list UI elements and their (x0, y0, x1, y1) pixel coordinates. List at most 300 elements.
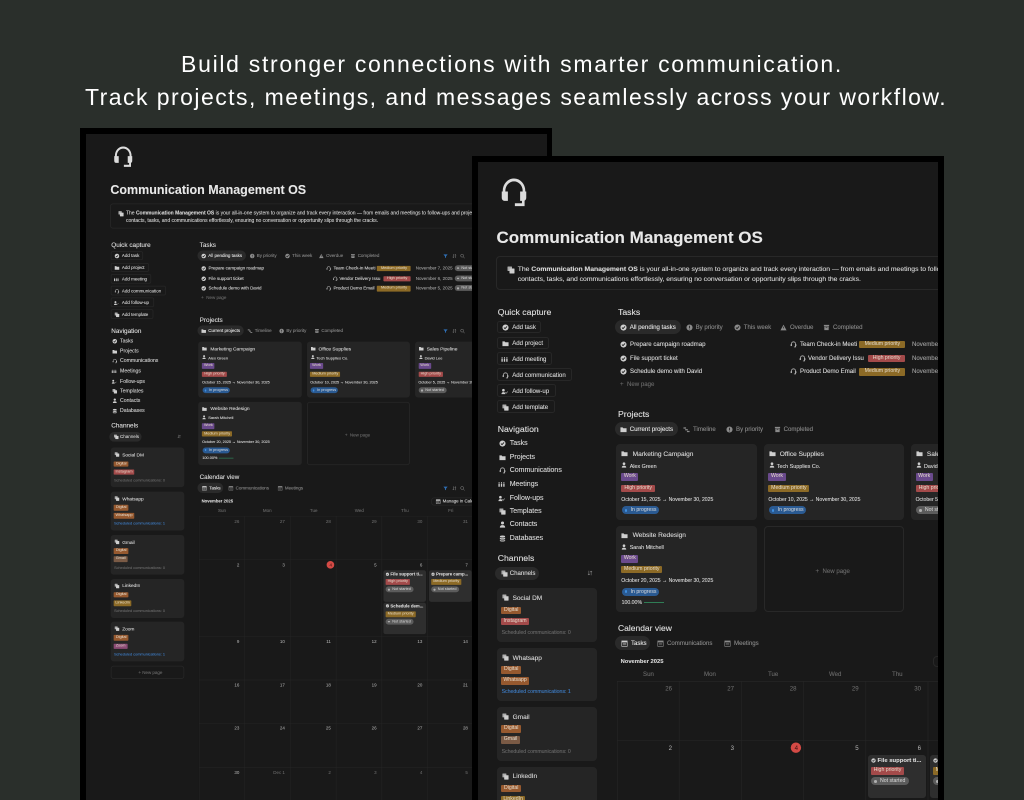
channel: linkedin: LinkedIn (513, 773, 537, 780)
card: new page: + New page (816, 568, 850, 575)
panel: projects (198, 316, 484, 465)
channel: linkedin: Scheduled communications: 0 (114, 609, 165, 614)
channel: zoom: Digital (116, 635, 126, 640)
channel: gmail: Gmail (504, 736, 517, 742)
calendar grid: 4 (795, 745, 799, 752)
task row: file support ticket: High priority (873, 355, 900, 361)
event: file support ticket: High priority (874, 767, 901, 773)
card: website redesign: Sarah Mitchell (630, 545, 664, 551)
weekday labels: Wed (355, 509, 364, 514)
task row: schedule demo with david: Product Demo Email (800, 368, 856, 375)
callout: description: The Communication Management OS is your all-in-one system to organize and track every interaction — from emails and meetings to follow-ups and projects. Manage your (126, 211, 510, 216)
tabs: tasks: By priority (257, 253, 277, 259)
event: file support ticket: Not started (392, 587, 411, 592)
button: add follow-up: Add follow-up (122, 300, 149, 306)
tabs: projects: Current projects (630, 426, 673, 433)
channel: gmail: Gmail (116, 556, 126, 561)
heading: quick capture: Quick capture (498, 307, 551, 317)
card: office supplies: October 10, 2025 → November 30, 2025 (310, 381, 378, 385)
panel: tasks (615, 307, 938, 388)
card: website redesign: Work (204, 423, 213, 428)
heading: quick capture: Quick capture (111, 241, 151, 248)
calendar grid: 29 (852, 686, 860, 692)
event: prepare campaign: Prepare camp... (436, 572, 468, 577)
event: schedule demo: Not started (392, 619, 411, 624)
nav list: Meetings (510, 481, 538, 488)
task row: prepare campaign roadmap: November 7, 2025 (416, 266, 453, 271)
button: add template (497, 400, 555, 413)
tabs: projects: By priority (736, 426, 763, 433)
card: website redesign: Work (624, 555, 636, 561)
calendar grid: 5 (374, 563, 377, 568)
nav list: Contacts (120, 398, 140, 404)
card: website redesign: Website Redesign (210, 407, 250, 412)
calendar grid: 26 (372, 726, 377, 731)
tabs: tasks (615, 320, 862, 334)
nav list: Meetings (120, 369, 141, 374)
calendar grid: 16 (235, 682, 240, 687)
button: add project: Add project (512, 340, 543, 347)
heading: navigation: Navigation (111, 327, 141, 334)
button: add task: Add task (122, 254, 139, 259)
task row: file support ticket (620, 355, 938, 362)
task row: schedule demo with david: November 5, 2025 (416, 286, 453, 291)
event: file support ticket: Not started (880, 778, 905, 784)
channel: linkedin: Digital (116, 592, 126, 596)
card: office supplies (764, 444, 904, 520)
task row: schedule demo with david: Schedule demo with David (630, 368, 702, 375)
channel: gmail: Scheduled communications: 0 (114, 566, 165, 570)
card: new page (764, 526, 904, 612)
tabs: tasks: Completed (358, 253, 379, 259)
card: office supplies: Medium priority (771, 485, 807, 491)
nav list: Follow-ups (510, 495, 544, 502)
weekday labels: Tue (310, 509, 317, 514)
channel: gmail (110, 535, 184, 574)
button: add project: Add project (122, 265, 145, 271)
task row: prepare campaign roadmap: Prepare campaign roadmap (630, 341, 706, 348)
event: prepare campaign (930, 755, 988, 798)
card: office supplies: Work (771, 473, 783, 479)
task row: prepare campaign roadmap: Not started (461, 266, 480, 270)
heading: navigation: Navigation (498, 424, 539, 434)
calendar grid: 3 (731, 745, 735, 752)
button: add follow-up: Add follow-up (512, 388, 549, 395)
calendar grid: 2 (669, 745, 673, 752)
weekday labels: Tue (768, 671, 778, 678)
channel: whatsapp: Whatsapp (115, 513, 133, 517)
nav list: Templates (120, 389, 144, 394)
tabs: tasks: This week (744, 324, 771, 331)
card: marketing campaign: Alex Green (630, 464, 657, 470)
button: add template (111, 309, 153, 319)
task row: prepare campaign roadmap (202, 265, 480, 272)
tabs: tasks: All pending tasks (208, 253, 242, 259)
calendar grid: 28 (790, 686, 797, 692)
channel: social dm (110, 448, 184, 487)
task row: file support ticket: November 6, 2025 (416, 276, 453, 281)
tabs: tasks: All pending tasks (630, 324, 676, 331)
calendar grid: 5 (856, 745, 860, 752)
calendar grid: 24 (280, 726, 286, 731)
calendar grid: 5 (466, 770, 469, 775)
calendar grid: 7 (466, 563, 469, 568)
channel: whatsapp: Whatsapp (513, 655, 542, 662)
channel: whatsapp (110, 492, 184, 531)
card: website redesign: October 20, 2025 → November 30, 2025 (202, 440, 270, 445)
card: new page (307, 402, 410, 465)
channel: social dm (497, 588, 597, 642)
card: new page: + New page (345, 432, 370, 438)
nav list (112, 338, 158, 414)
calendar grid: 3 (374, 770, 377, 775)
title: Communication Management OS (496, 228, 763, 247)
task row: file support ticket: Not started (461, 276, 480, 281)
weekday labels: Mon (704, 671, 716, 678)
panel: quick capture (497, 307, 572, 413)
task row: schedule demo with david (620, 368, 938, 376)
card: marketing campaign: Alex Green (208, 356, 228, 360)
calendar grid: 28 (326, 519, 332, 524)
task row: file support ticket: File support ticket (630, 355, 678, 362)
heading: tasks: Tasks (618, 307, 640, 317)
weekday labels: Thu (401, 509, 409, 514)
panel: back window frame (80, 128, 552, 800)
callout: description: contacts, tasks, and communications effortlessly, ensuring no conversation or opportunity slips through the cracks. (126, 218, 378, 224)
card: sales pipeline: David Lee (425, 356, 442, 360)
button: add communication (497, 368, 572, 381)
channel: whatsapp: Digital (116, 505, 126, 509)
nav list: Communications (510, 467, 562, 474)
month label: November 2025 (202, 499, 233, 504)
panel: channels (495, 553, 597, 800)
nav list: Tasks (120, 339, 133, 344)
calendar grid: 28 (463, 726, 469, 731)
tabs: calendar: Meetings (285, 486, 303, 491)
tabs: calendar: Tasks (209, 486, 221, 491)
card: office supplies: Tech Supplies Co. (777, 464, 820, 470)
button: add follow-up (497, 384, 556, 397)
card: marketing campaign: Marketing Campaign (633, 451, 693, 458)
card: marketing campaign: Marketing Campaign (210, 346, 255, 352)
task row: schedule demo with david: Schedule demo with David (208, 286, 262, 291)
button: add project (497, 337, 549, 349)
tabs: projects: Timeline (693, 426, 716, 433)
card: marketing campaign (616, 444, 757, 520)
panel: navigation (111, 327, 158, 414)
button: new page: + New page (201, 295, 226, 300)
card: website redesign: Medium priority (624, 566, 660, 572)
button: add project (111, 263, 149, 272)
card: website redesign: Website Redesign (633, 532, 686, 539)
weekday labels: Mon (263, 509, 272, 514)
card: office supplies: In progress (317, 388, 336, 393)
weekday labels: Wed (829, 671, 841, 678)
tabs: projects: Timeline (255, 328, 272, 333)
card: marketing campaign: In progress (209, 388, 228, 393)
calendar grid: 2 (329, 770, 332, 775)
card: website redesign: October 20, 2025 → November 30, 2025 (621, 578, 713, 584)
calendar grid: 4 (330, 563, 333, 568)
panel: front window (478, 162, 938, 800)
task row: file support ticket: Vendor Delivery Issu (808, 355, 864, 362)
nav list: Projects (510, 454, 535, 461)
calendar grid: 4 (420, 770, 423, 775)
card: marketing campaign: High priority (204, 372, 225, 376)
channel: gmail (497, 707, 597, 761)
event: file support ticket: High priority (388, 579, 408, 584)
tabs: tasks: Overdue (326, 253, 343, 259)
calendar grid: 2 (237, 563, 240, 568)
icon: headset (114, 146, 132, 167)
tabs: tasks (198, 250, 465, 260)
nav list: Projects (120, 349, 139, 354)
button: new page: + New page (620, 381, 654, 388)
calendar grid: 10 (280, 639, 286, 644)
card: marketing campaign: October 15, 2025 → November 30, 2025 (202, 381, 270, 385)
card: office supplies (307, 342, 410, 397)
event: file support ticket (383, 570, 426, 602)
weekday labels (643, 671, 903, 678)
callout: description: contacts, tasks, and communications effortlessly, ensuring no conversation or opportunity slips through the cracks. (518, 276, 861, 283)
card: website redesign: Sarah Mitchell (208, 416, 233, 420)
calendar grid: 14 (463, 639, 469, 644)
channel: whatsapp: Scheduled communications: 1 (114, 522, 165, 526)
title: Communication Management OS (110, 183, 306, 197)
calendar grid: 25 (326, 726, 332, 731)
panel: tasks (198, 241, 480, 300)
channel: gmail: Gmail (513, 714, 530, 721)
calendar grid: 26 (666, 686, 673, 692)
heading: projects: Projects (618, 409, 649, 419)
event: schedule demo: Medium priority (388, 611, 414, 616)
task row: schedule demo with david: Medium priority (865, 368, 900, 374)
channel: social dm: Social DM (513, 595, 542, 602)
channel: social dm: Scheduled communications: 0 (114, 478, 165, 482)
tabs: projects (615, 422, 813, 436)
button: add meeting: Add meeting (512, 356, 546, 363)
channel: linkedin (497, 767, 597, 800)
task row: file support ticket: File support ticket (208, 276, 244, 281)
calendar grid: 30 (418, 519, 423, 524)
card: website redesign: Medium priority (204, 431, 230, 435)
nav list: Follow-ups (120, 379, 145, 384)
card: sales pipeline: Work (918, 473, 930, 479)
calendar grid: Dec 1 (274, 770, 286, 775)
channel: social dm: Scheduled communications: 0 (502, 630, 571, 636)
calendar grid: 27 (280, 519, 286, 524)
nav list: Contacts (510, 521, 537, 528)
nav list: Databases (510, 535, 543, 542)
channel: zoom: Scheduled communications: 1 (114, 652, 165, 657)
heading: tagline (85, 50, 947, 110)
channel: whatsapp: Whatsapp (122, 496, 144, 502)
nav list: Communications (120, 359, 158, 364)
card: marketing campaign: October 15, 2025 → November 30, 2025 (621, 497, 713, 503)
card: office supplies: Work (312, 363, 321, 368)
task row: file support ticket: Vendor Delivery Issu (339, 276, 380, 281)
weekday labels: Sun (643, 671, 654, 678)
channel: social dm: Instagram (504, 618, 527, 624)
button: add template: Add template (512, 404, 548, 411)
task row: file support ticket (201, 276, 480, 282)
task row: prepare campaign roadmap: Medium priority (865, 341, 900, 347)
event: prepare campaign: Not started (438, 587, 456, 592)
calendar grid: 3 (283, 563, 286, 568)
calendar grid: 21 (463, 682, 469, 687)
tabs: projects (198, 326, 465, 336)
card: website redesign: 100.00% (622, 600, 642, 606)
heading: tagline: Build stronger connections with smarter communication. (181, 50, 843, 76)
tabs: tasks: Overdue (790, 324, 813, 331)
tab: channels (109, 432, 142, 442)
card: office supplies: In progress (778, 507, 804, 513)
card: sales pipeline (911, 444, 1024, 520)
weekday labels (218, 508, 454, 514)
card: marketing campaign: In progress (631, 507, 657, 513)
nav list: Tasks (510, 440, 528, 447)
task row: schedule demo with david: Not started (461, 286, 480, 290)
button: add meeting (111, 274, 151, 283)
button: new page: + New page (138, 670, 162, 675)
calendar grid: 23 (235, 726, 240, 731)
card: website redesign: In progress (209, 448, 228, 452)
button: add communication (111, 286, 166, 295)
tabs: calendar (198, 483, 465, 493)
button: add meeting: Add meeting (122, 277, 147, 282)
channel: linkedin: LinkedIn (122, 584, 140, 589)
card: website redesign (198, 402, 302, 465)
nav list: Templates (510, 508, 542, 515)
callout: description (110, 203, 610, 228)
card: sales pipeline: Not started (425, 388, 444, 393)
calendar grid: 12 (372, 639, 377, 644)
task row: schedule demo with david: Product Demo Email (333, 286, 375, 291)
tab: channels: Channels (120, 434, 139, 439)
calendar grid (199, 516, 472, 800)
button: add meeting (497, 352, 552, 365)
calendar grid: 13 (418, 639, 423, 644)
calendar grid: 6 (918, 745, 922, 752)
button: add task (111, 251, 143, 260)
weekday labels: Fri (448, 509, 453, 514)
button: add task: Add task (512, 324, 536, 331)
calendar grid: 17 (280, 682, 286, 687)
event: prepare campaign (429, 570, 471, 602)
button: add follow-up (111, 298, 154, 307)
tabs: calendar: Tasks (631, 640, 647, 647)
channel: social dm: Digital (504, 607, 518, 613)
heading: tagline: Track projects, meetings, and messages seamlessly across your workflow. (85, 84, 947, 110)
heading: projects: Projects (200, 316, 223, 323)
channel: social dm: Digital (116, 461, 126, 466)
calendar grid: 26 (235, 519, 240, 524)
card: marketing campaign: Work (624, 473, 636, 479)
tabs: tasks: By priority (696, 324, 723, 331)
nav list (498, 440, 562, 542)
button: add task (497, 321, 541, 333)
channel: linkedin: Digital (504, 785, 518, 791)
month label: November 2025 (621, 659, 663, 665)
panel: calendar view (615, 623, 938, 800)
button: manage in calendar: Manage in Calendar (443, 500, 482, 504)
card: marketing campaign (198, 342, 302, 397)
tabs: calendar: Meetings (734, 640, 759, 647)
channel: gmail: Digital (116, 548, 126, 553)
tabs: projects: By priority (286, 328, 306, 333)
panel: calendar view (198, 473, 482, 800)
task row: prepare campaign roadmap: Team Check-in Meeti (800, 341, 857, 348)
callout: description (496, 256, 1024, 290)
button: add communication: Add communication (122, 289, 161, 294)
tab: channels (495, 567, 539, 580)
button: add template: Add template (122, 312, 148, 317)
button: manage in calendar (933, 656, 1013, 667)
card: website redesign (616, 526, 757, 612)
channel: social dm: Instagram (116, 469, 133, 474)
task row: file support ticket: High priority (387, 276, 407, 280)
tabs: projects: Completed (784, 426, 813, 433)
card: marketing campaign: High priority (624, 485, 652, 491)
card: website redesign: In progress (631, 589, 657, 595)
channel: zoom (110, 622, 184, 661)
calendar grid: 30 (235, 770, 240, 775)
tabs: projects: Current projects (208, 328, 240, 333)
channel: gmail: Gmail (122, 540, 135, 545)
nav list: Databases (120, 408, 145, 414)
calendar grid: 19 (372, 682, 377, 687)
card: marketing campaign: Work (204, 363, 213, 368)
calendar grid: 31 (463, 519, 469, 524)
channel: gmail: Digital (504, 725, 518, 731)
event: file support ticket: File support ti... (878, 758, 921, 764)
button: add communication: Add communication (512, 372, 566, 379)
weekday labels: Sun (218, 509, 226, 514)
channel: zoom: Zoom (116, 643, 125, 648)
calendar grid: 18 (326, 682, 332, 687)
calendar grid: 27 (418, 726, 423, 731)
event: prepare campaign: Medium priority (433, 579, 459, 584)
card: sales pipeline: High priority (421, 372, 441, 376)
card: sales pipeline: Sales Pipeline (427, 346, 457, 352)
event: schedule demo (383, 602, 426, 634)
card: sales pipeline: October 5, 2025 → November 20, 2025 (418, 381, 484, 385)
channel: linkedin: LinkedIn (115, 600, 130, 605)
card: website redesign: 100.00% (202, 456, 217, 460)
channel: linkedin (110, 579, 184, 618)
icon: swap (588, 570, 592, 576)
calendar grid: 29 (372, 519, 377, 524)
calendar grid: 6 (420, 563, 423, 568)
calendar grid (617, 681, 938, 800)
tabs: calendar (615, 636, 759, 650)
calendar grid: 20 (418, 682, 423, 687)
button: manage in calendar (431, 497, 490, 505)
card: sales pipeline (415, 342, 518, 397)
channel: whatsapp: Whatsapp (503, 677, 527, 683)
channel: zoom: Zoom (122, 627, 134, 632)
tabs: calendar: Communications (667, 640, 712, 647)
card: office supplies: October 10, 2025 → November 30, 2025 (768, 497, 860, 503)
weekday labels: Thu (892, 671, 903, 678)
tabs: calendar: Communications (236, 486, 269, 491)
button: new page (110, 666, 184, 679)
event: file support ticket (868, 755, 926, 798)
channel: whatsapp: Scheduled communications: 1 (502, 689, 571, 695)
task row: prepare campaign roadmap: Medium priority (381, 266, 407, 270)
panel: navigation (498, 424, 562, 542)
heading: channels: Channels (498, 553, 534, 563)
